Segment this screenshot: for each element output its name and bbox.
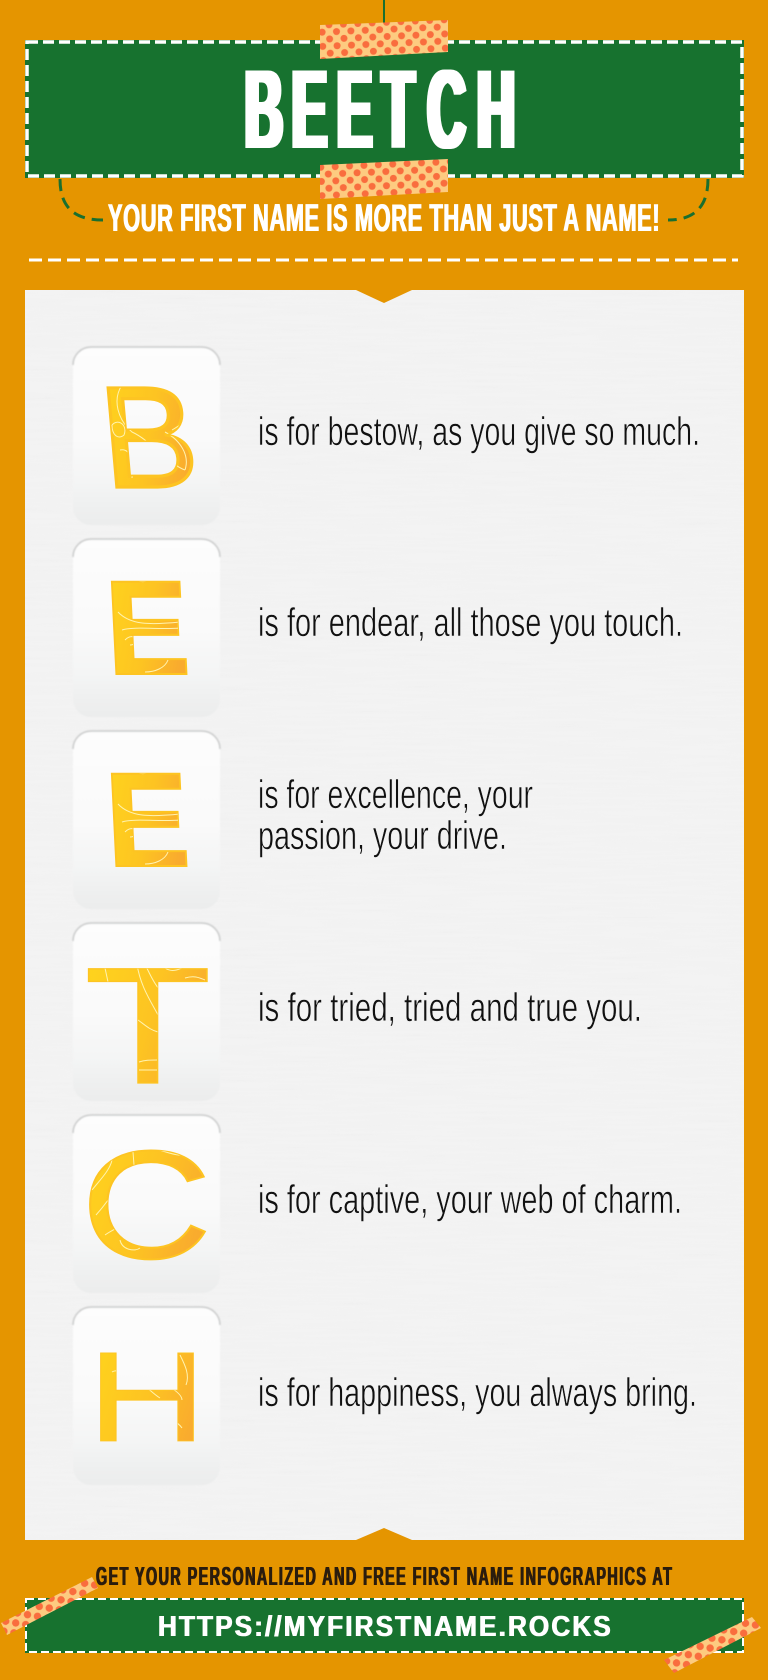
footer left tape (1, 1577, 98, 1635)
tile: T: T (84, 933, 212, 1118)
bottom tape (320, 159, 448, 199)
hanging string (383, 0, 385, 24)
text: T line: is for tried, tried and true you. (258, 986, 642, 1030)
main panel (25, 290, 744, 1540)
footer banner (25, 1598, 744, 1653)
text: E second lines: passion, your drive. (258, 814, 507, 858)
top tape (320, 20, 448, 59)
title banner (25, 40, 744, 178)
text: E second lines: is for excellence, your (258, 773, 533, 817)
right dashed connector (668, 179, 708, 220)
tile: E second: E (102, 746, 193, 895)
left dashed connector (60, 179, 103, 220)
tile: H (72, 1306, 222, 1442)
tile: E (72, 538, 222, 675)
tile: E: E (102, 554, 193, 703)
footer call to action: GET YOUR PERSONALIZED AND FREE FIRST NAME INFOGRAPHICS AT (96, 1563, 672, 1591)
subtitle: YOUR FIRST NAME IS MORE THAN JUST A NAME! (108, 195, 660, 240)
text: E second lines (258, 773, 533, 858)
tile: B: B (94, 357, 204, 518)
tile: B (72, 346, 222, 489)
footer url: HTTPS://MYFIRSTNAME.ROCKS (158, 1610, 611, 1642)
tile: C: C (81, 1119, 212, 1291)
tile: E second (72, 730, 222, 867)
tile: T (72, 922, 222, 1084)
footer right tape (664, 1617, 761, 1673)
title: BEETCH (245, 47, 515, 172)
tile: H: H (87, 1326, 207, 1469)
